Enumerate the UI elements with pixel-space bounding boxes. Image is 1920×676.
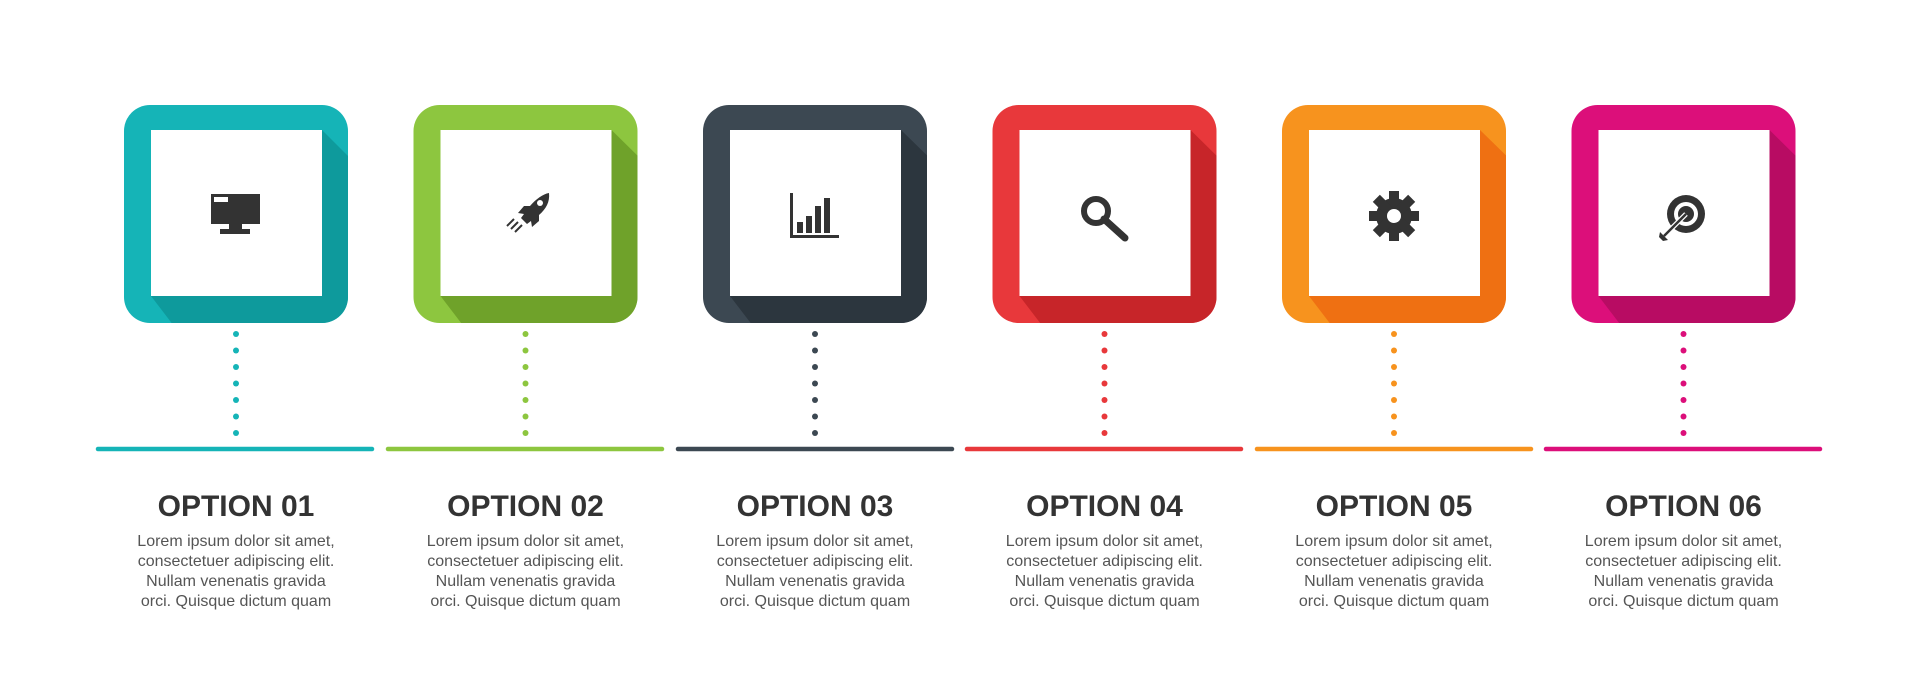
text block 06 [1585,533,1782,610]
text block 05: consectetuer adipiscing elit. [1296,553,1492,570]
icon: gear [1369,191,1419,241]
heading 04: OPTION 04 [1026,490,1183,523]
timeline segment 04 [967,447,1241,451]
text block 01: orci. Quisque dictum quam [141,593,331,610]
heading 02: OPTION 02 [447,490,604,523]
timeline segment 05 [1257,447,1531,451]
text block 04: Lorem ipsum dolor sit amet, [1006,533,1203,550]
text block 06: Nullam venenatis gravida [1594,573,1773,590]
text block 03: orci. Quisque dictum quam [720,593,910,610]
heading 01: OPTION 01 [158,490,314,523]
panel: option 03 [678,105,952,610]
heading 03: OPTION 03 [737,490,893,523]
dotted connector 06 [1680,331,1686,436]
icon box 06 [1572,105,1808,330]
dotted connector 04 [1102,331,1108,436]
text block 03: Lorem ipsum dolor sit amet, [716,533,914,550]
text block 06: orci. Quisque dictum quam [1588,593,1779,610]
icon box 03 [703,105,940,330]
icon: monitor [211,194,260,234]
text block 05 [1295,533,1493,610]
icon box 04 [992,105,1229,330]
timeline segment 01 [98,447,372,451]
timeline segment 02 [388,447,662,451]
text block 02: consectetuer adipiscing elit. [427,553,624,570]
text block 01: Lorem ipsum dolor sit amet, [137,533,335,550]
text block 02: orci. Quisque dictum quam [430,593,621,610]
dotted connector 05 [1391,331,1397,436]
text block 02: Lorem ipsum dolor sit amet, [427,533,624,550]
text block 04 [1006,533,1203,610]
icon box 02 [414,105,650,330]
dotted connector 03 [812,331,818,436]
text block 05: Lorem ipsum dolor sit amet, [1295,533,1493,550]
text block 06: consectetuer adipiscing elit. [1585,553,1782,570]
text block 04: Nullam venenatis gravida [1015,573,1194,590]
heading 05: OPTION 05 [1316,490,1472,523]
panel: option 02 [388,105,662,610]
text block 01: Nullam venenatis gravida [146,573,326,590]
timeline segment 03 [678,447,952,451]
icon: target [1659,195,1705,241]
panel: option 04 [967,105,1241,610]
icon: bar chart [790,193,839,238]
icon box 01 [124,105,360,330]
text block 05: orci. Quisque dictum quam [1299,593,1489,610]
dotted connector 01 [233,331,239,436]
text block 06: Lorem ipsum dolor sit amet, [1585,533,1782,550]
text block 03: Nullam venenatis gravida [725,573,905,590]
text block 02 [427,533,624,610]
text block 05: Nullam venenatis gravida [1304,573,1484,590]
dotted connector 02 [522,331,528,436]
timeline segment 06 [1546,447,1820,451]
text block 03 [716,533,914,610]
text block 01 [137,533,335,610]
panel: option 05 [1257,105,1531,610]
panel: option 06 [1546,105,1820,610]
panel: option 01 [98,105,372,610]
icon: rocket [507,193,549,232]
icon: magnifier [1084,199,1125,238]
heading 06: OPTION 06 [1605,490,1762,523]
text block 01: consectetuer adipiscing elit. [138,553,334,570]
text block 03: consectetuer adipiscing elit. [717,553,913,570]
icon box 05 [1282,105,1519,330]
text block 04: orci. Quisque dictum quam [1009,593,1200,610]
text block 02: Nullam venenatis gravida [436,573,615,590]
text block 04: consectetuer adipiscing elit. [1006,553,1203,570]
